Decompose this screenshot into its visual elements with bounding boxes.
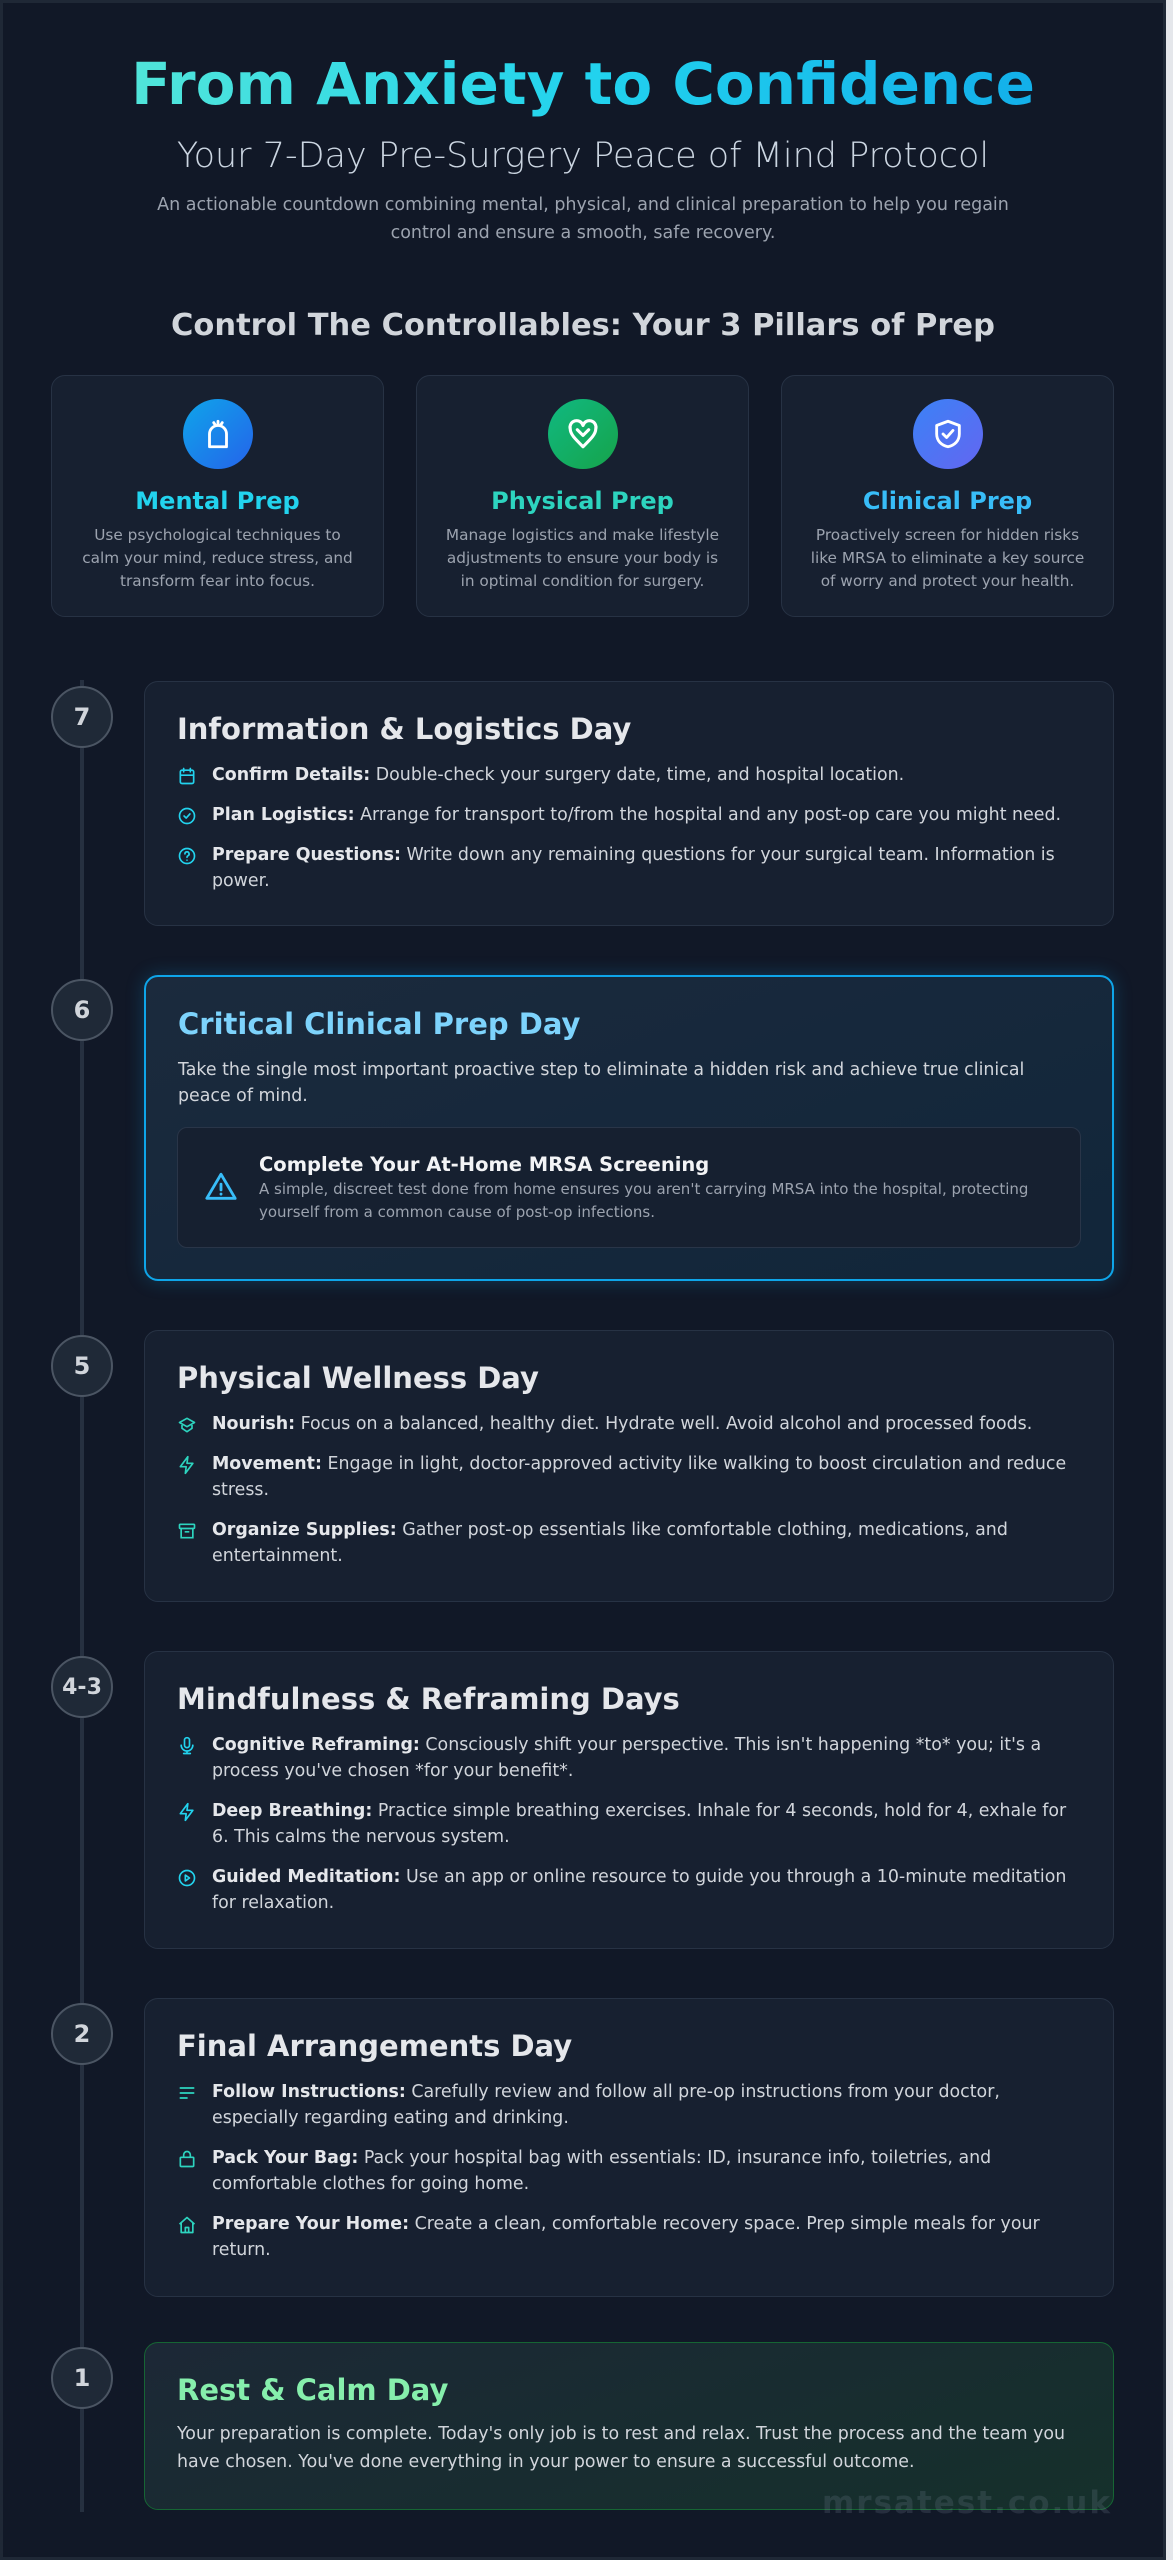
callout text [259, 1153, 1028, 1221]
heading: Final Arrangements Day [177, 2029, 572, 2063]
item: guided meditation: Guided Meditation: Use an app or online resource to guide you through a 10-minute meditation for relaxation. [212, 1867, 1066, 1913]
subtitle: Your 7-Day Pre-Surgery Peace of Mind Protocol [177, 136, 989, 176]
heading: Information & Logistics Day [177, 712, 631, 746]
text [82, 526, 353, 590]
intro text [157, 195, 1009, 243]
text: Your preparation is complete. Today's only job is to rest and relax. Trust the process and the team you have chosen. You've done everything in your power to ensure a successful outcome. [177, 2424, 1065, 2472]
panel: physical prep [416, 375, 749, 617]
marker: day 1 [51, 2347, 113, 2409]
text: Proactively screen for hidden risks [816, 526, 1079, 544]
marker: day 2: 2 [74, 2020, 90, 2048]
title: From Anxiety to Confidence [131, 50, 1035, 118]
item: prepare your home: Prepare Your Home: Create a clean, comfortable recovery space. Prep simple meals for your return. [212, 2214, 1040, 2260]
panel: mental prep [51, 375, 384, 617]
text: Manage logistics and make lifestyle [446, 526, 719, 544]
text: in optimal condition for surgery. [461, 572, 704, 590]
timeline line [80, 680, 84, 2512]
marker: day 2 [51, 2003, 113, 2065]
marker: day 7: 7 [74, 703, 90, 731]
text: Take the single most important proactive step to eliminate a hidden risk and achieve true clinical peace of mind. [178, 1060, 1024, 1106]
text: like MRSA to eliminate a key source [811, 549, 1084, 567]
text: calm your mind, reduce stress, and [82, 549, 353, 567]
icon: shield [913, 399, 983, 469]
heading: Mindfulness & Reframing Days [177, 1682, 680, 1716]
callout: MRSA screening [177, 1127, 1081, 1248]
panel: day 1 [144, 2342, 1114, 2510]
heading: Mental Prep [135, 487, 300, 515]
heading: Physical Prep [491, 487, 674, 515]
item: organize supplies: Organize Supplies: Gather post-op essentials like comfortable clothing, medications, and entertainment. [212, 1520, 1008, 1566]
panel: days 4-3 [144, 1651, 1114, 1949]
marker: days 4-3 [51, 1656, 113, 1718]
heading: Physical Wellness Day [177, 1361, 539, 1395]
item: movement: Movement: Engage in light, doctor-approved activity like walking to boost circulation and reduce stress. [212, 1454, 1066, 1500]
panel: day 2 [144, 1998, 1114, 2297]
panel: day 6 [144, 975, 1114, 1281]
marker: day 6: 6 [74, 996, 90, 1024]
icon: warning [205, 1172, 237, 1200]
item: confirm details: Confirm Details: Double-check your surgery date, time, and hospital location. [212, 765, 904, 785]
item: plan logistics: Plan Logistics: Arrange for transport to/from the hospital and any post-op care you might need. [212, 805, 1061, 825]
item: cognitive reframing: Cognitive Reframing: Consciously shift your perspective. This isn't happening *to* you; it's a process you've chosen *for your benefit*. [212, 1735, 1041, 1781]
panel: day 5 [144, 1330, 1114, 1602]
heading: Rest & Calm Day [177, 2373, 448, 2407]
text [811, 526, 1084, 590]
marker: day 5 [51, 1335, 113, 1397]
watermark: mrsatest.co.uk [822, 2485, 1112, 2521]
text: adjustments to ensure your body is [447, 549, 718, 567]
marker: day 7 [51, 686, 113, 748]
intro text: An actionable countdown combining mental, physical, and clinical preparation to help you regain [157, 195, 1009, 215]
callout text: A simple, discreet test done from home ensures you aren't carrying MRSA into the hospital, protecting yourself from a common cause of post-op infections. [259, 1180, 1028, 1221]
item: follow instructions: Follow Instructions: Carefully review and follow all pre-op instructions from your doctor, especially regarding eating and drinking. [212, 2082, 1000, 2128]
text: of worry and protect your health. [821, 572, 1074, 590]
item: deep breathing: Deep Breathing: Practice simple breathing exercises. Inhale for 4 seconds, hold for 4, exhale for 6. This calms the nervous system. [212, 1801, 1066, 1847]
text: Use psychological techniques to [94, 526, 341, 544]
intro text: control and ensure a smooth, safe recovery. [391, 223, 775, 243]
section heading: Control The Controllables: Your 3 Pillars of Prep [171, 308, 995, 343]
icon: heart [548, 399, 618, 469]
item: pack your bag: Pack Your Bag: Pack your hospital bag with essentials: ID, insurance info, toiletries, and comfortable clothes for going home. [212, 2148, 991, 2194]
heading: Clinical Prep [863, 487, 1032, 515]
panel: day 7 [144, 681, 1114, 926]
panel: clinical prep [781, 375, 1114, 617]
marker: days 4-3: 4-3 [62, 1674, 102, 1700]
item: prepare questions: Prepare Questions: Write down any remaining questions for your surgical team. Information is power. [212, 845, 1055, 891]
heading: Critical Clinical Prep Day [178, 1007, 580, 1041]
text: transform fear into focus. [120, 572, 315, 590]
icon: mind [183, 399, 253, 469]
marker: day 6 [51, 979, 113, 1041]
marker: day 1: 1 [74, 2364, 90, 2392]
item: nourish: Nourish: Focus on a balanced, healthy diet. Hydrate well. Avoid alcohol and processed foods. [212, 1414, 1032, 1434]
text [446, 526, 719, 590]
callout text: Complete Your At-Home MRSA Screening [259, 1153, 709, 1176]
marker: day 5: 5 [74, 1352, 90, 1380]
